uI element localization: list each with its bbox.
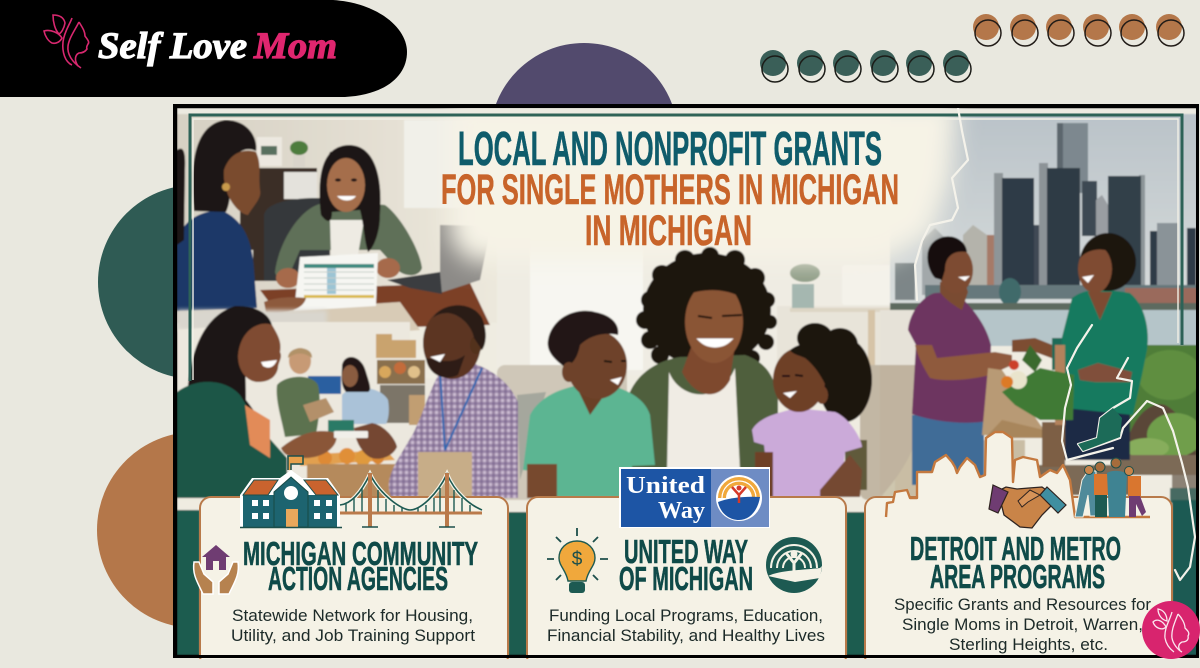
United Way logo: United	[626, 473, 706, 499]
mother	[636, 247, 777, 367]
woman in green cardigan	[187, 306, 272, 410]
panel: United Way of Michigan	[527, 467, 846, 667]
scene: living room background	[530, 264, 890, 370]
panel: Michigan Community Action Agencies: Utility, and Job Training Support	[231, 626, 475, 645]
document	[294, 253, 378, 311]
top pale edge	[177, 108, 1197, 114]
logo wordmark: Self Love	[98, 26, 247, 67]
icon: school with clock	[240, 456, 342, 528]
icon: lightbulb with dollar: $	[572, 549, 583, 570]
icon: people group	[1075, 458, 1146, 517]
page background below frame	[0, 659, 1200, 668]
icon: bridge	[340, 473, 482, 527]
girl	[796, 322, 832, 346]
icon: handshake	[989, 485, 1066, 528]
panel: Michigan Community Action Agencies	[194, 456, 508, 667]
scene: food pantry	[177, 305, 518, 500]
teal dot row	[760, 50, 971, 82]
card description: Statewide Network for Housing,	[232, 606, 473, 625]
scene: soft fade between upper and lower left	[177, 310, 327, 330]
icon: city skyline outline	[886, 432, 1150, 517]
Michigan outline	[915, 108, 1195, 580]
woman in sage	[275, 203, 422, 280]
laptop	[440, 225, 491, 293]
decorative purple semicircle	[490, 43, 678, 231]
black frame	[173, 104, 1199, 658]
pink badge	[1142, 601, 1200, 659]
decorative brown circle	[97, 432, 293, 628]
green inner frame	[190, 115, 1182, 381]
scene: Detroit skyline	[880, 108, 1197, 370]
icon: house in hands	[194, 545, 238, 594]
logo icon: woman profile with leaves	[44, 15, 89, 68]
card heading: UNITED WAY	[624, 533, 748, 570]
panel: United Way of Michigan: OF MICHIGAN	[619, 560, 753, 597]
United Way logo: Way	[658, 498, 705, 524]
woman in purple	[912, 415, 984, 485]
man in plaid shirt	[389, 360, 518, 498]
icon: United Way symbol	[766, 537, 822, 593]
card description: Funding Local Programs, Education,	[549, 606, 823, 625]
panel: Detroit and Metro Area Programs	[865, 432, 1172, 667]
panel: Detroit and Metro Area Programs: Single Moms in Detroit, Warren,	[902, 615, 1143, 634]
United Way logo	[619, 467, 770, 528]
bottom teal strips	[177, 500, 1197, 655]
main title	[441, 123, 899, 255]
Michigan lake shape	[1078, 408, 1122, 451]
black frame bottom and right edge	[173, 104, 1199, 658]
logo banner: Mom	[253, 26, 337, 67]
scene: office meeting	[177, 114, 490, 332]
woman in green top	[1065, 400, 1130, 460]
main title: IN MICHIGAN	[585, 207, 752, 255]
main title: FOR SINGLE MOTHERS IN MICHIGAN	[441, 166, 899, 214]
decorative teal circle	[98, 185, 292, 379]
woman in navy	[177, 211, 257, 311]
icon: lightbulb with dollar	[547, 528, 608, 593]
panel: Michigan Community Action Agencies: ACTION AGENCIES	[268, 560, 448, 597]
panel: United Way of Michigan: Financial Stability, and Healthy Lives	[547, 626, 825, 645]
framed infographic image	[173, 100, 1200, 658]
boy	[523, 384, 655, 497]
panel: Detroit and Metro Area Programs: Sterling Heights, etc.	[949, 635, 1108, 654]
photo collage	[177, 100, 1200, 655]
scene: sofa and family	[497, 247, 925, 500]
logo banner	[0, 0, 407, 97]
card heading: MICHIGAN COMMUNITY	[243, 535, 478, 572]
brown dot row	[973, 14, 1184, 46]
grocery bag	[982, 368, 1044, 438]
card description: Specific Grants and Resources for	[894, 595, 1151, 614]
soft title backdrop	[450, 100, 958, 262]
scene: garden and neighbours	[880, 233, 1200, 503]
